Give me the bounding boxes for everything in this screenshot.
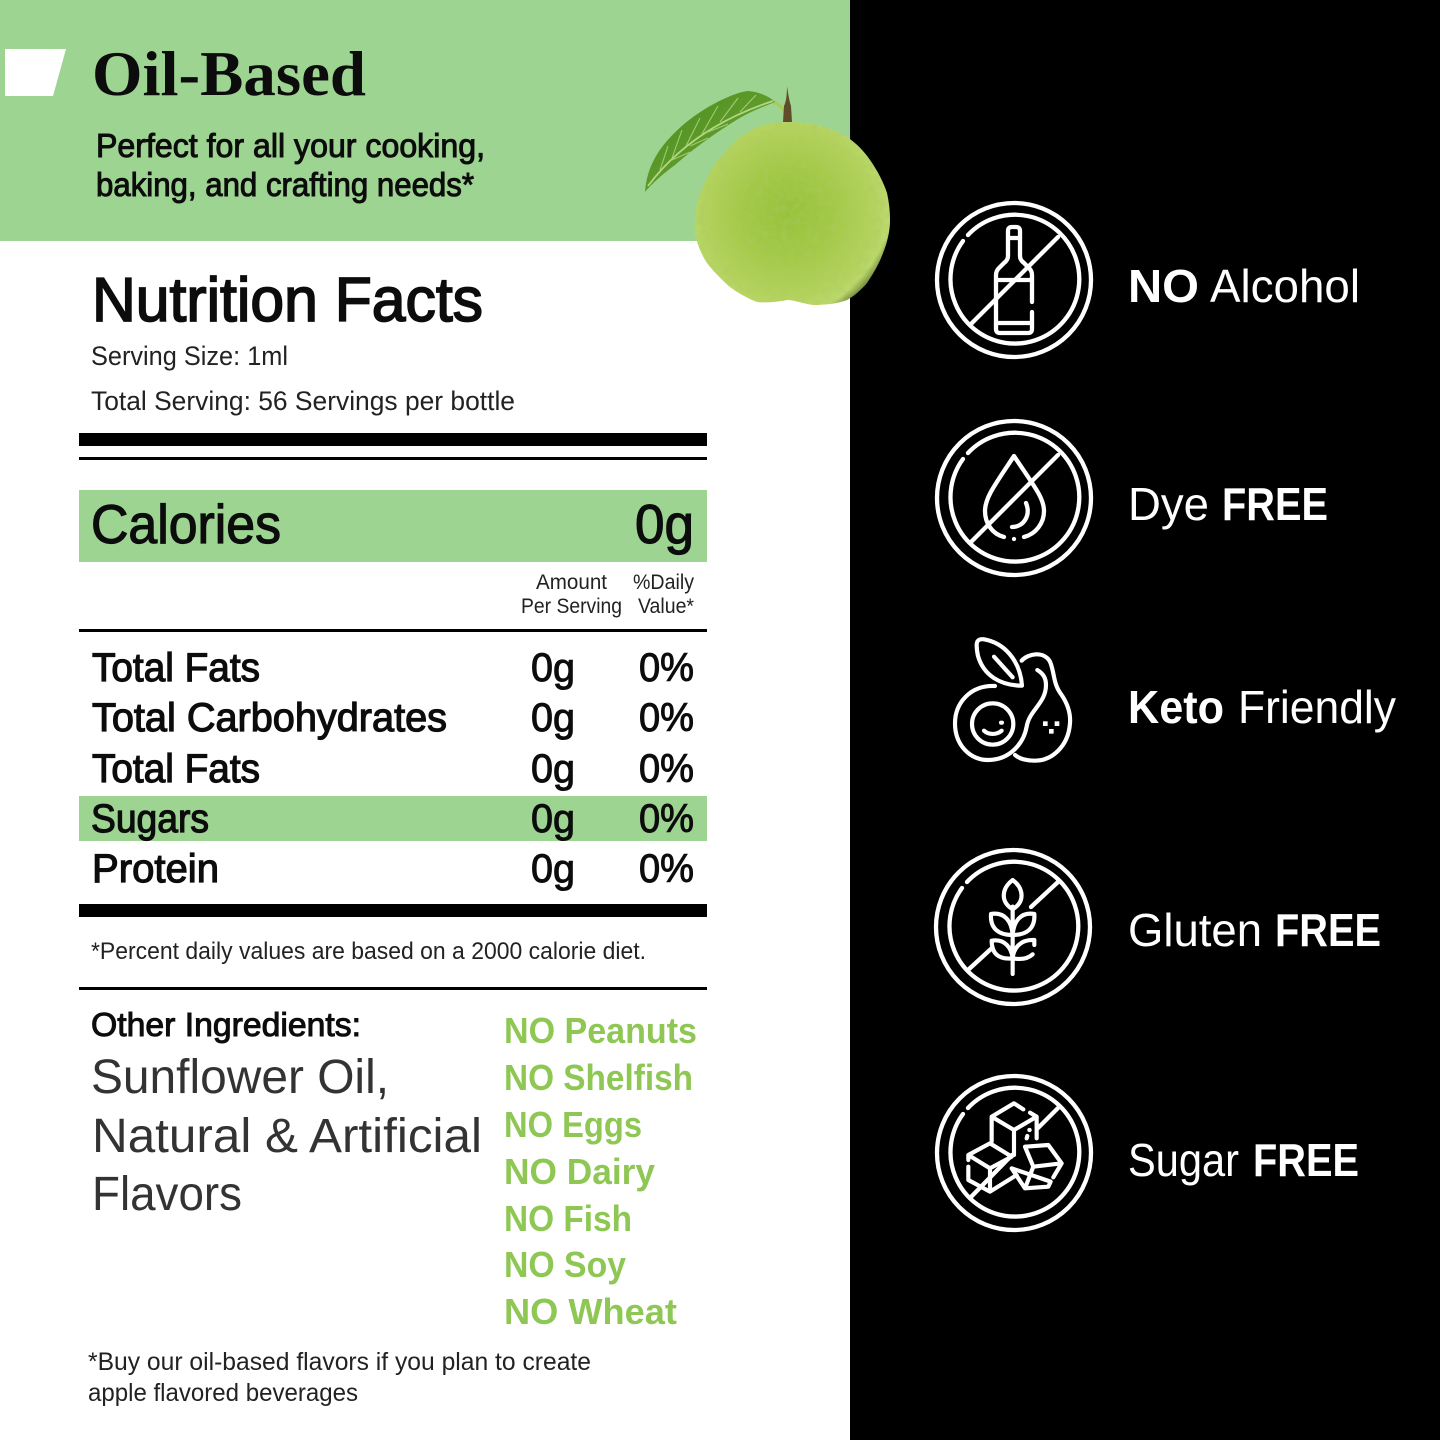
column headers	[521, 571, 694, 618]
column headers: %Daily	[633, 571, 694, 594]
label: sugar free	[1128, 1134, 1359, 1186]
row: total carbohydrates: Total Carbohydrates	[92, 696, 447, 740]
serving info	[91, 341, 515, 416]
icon: sugar free	[937, 1076, 1091, 1230]
nutrition facts heading: Nutrition Facts	[92, 266, 483, 335]
label: no alcohol: NO	[1128, 260, 1199, 312]
other ingredients: Other Ingredients:	[91, 1006, 361, 1043]
row: sugars	[91, 797, 694, 841]
calories row	[79, 490, 707, 562]
row: protein	[92, 847, 694, 891]
nutrient table	[79, 646, 707, 891]
icon: dye free	[937, 421, 1091, 575]
daily value note: *Percent daily values are based on a 2000 calorie diet.	[91, 938, 646, 965]
top rule thick	[79, 433, 707, 446]
other ingredients	[91, 1006, 482, 1221]
row: protein: Protein	[92, 847, 219, 891]
subtitle: Perfect for all your cooking,	[96, 127, 485, 164]
allergen free list: NO Peanuts	[504, 1010, 697, 1051]
row: protein: 0g	[531, 847, 575, 891]
header rule	[79, 629, 707, 632]
row: total carbohydrates: 0g	[531, 696, 575, 740]
label: keto friendly	[1128, 681, 1396, 733]
panel: black claims column	[850, 0, 1440, 1440]
row: total fats: 0%	[639, 646, 694, 690]
allergen free list: NO Eggs	[504, 1104, 642, 1145]
serving info: Total Serving: 56 Servings per bottle	[91, 386, 515, 416]
guava shaded edge	[695, 122, 890, 305]
row: total fats	[92, 646, 694, 690]
other ingredients: Flavors	[92, 1168, 242, 1221]
row: total fats repeat: Total Fats	[92, 747, 260, 791]
bottom thick rule	[79, 904, 707, 917]
label: dye free: FREE	[1222, 478, 1328, 530]
row: protein: 0%	[639, 847, 694, 891]
label: gluten free	[1128, 904, 1381, 956]
subtitle: baking, and crafting needs*	[96, 166, 474, 203]
label: sugar free: FREE	[1253, 1134, 1359, 1186]
label: gluten free: FREE	[1275, 904, 1381, 956]
row: sugars: 0%	[639, 797, 694, 841]
row: total fats repeat: 0%	[639, 747, 694, 791]
calories row: Calories	[91, 493, 281, 555]
row: total carbohydrates: 0%	[639, 696, 694, 740]
top rule thin	[79, 457, 707, 460]
sugars highlight	[79, 796, 707, 841]
icon: gluten free	[936, 850, 1090, 1004]
row: total fats: 0g	[531, 646, 575, 690]
allergen free list: NO Fish	[504, 1198, 632, 1239]
calories row: 0g	[635, 493, 694, 555]
column headers: Per Serving	[521, 595, 622, 618]
footnote: *Buy our oil-based flavors if you plan to create	[88, 1348, 591, 1376]
icon: no alcohol	[937, 203, 1091, 357]
icon: keto avocado and pear	[955, 639, 1070, 761]
footnote	[88, 1348, 591, 1407]
row: total fats repeat	[92, 747, 694, 791]
row: total carbohydrates	[92, 696, 694, 740]
row: sugars: 0g	[531, 797, 575, 841]
column headers: Value*	[638, 595, 694, 618]
guava body	[695, 122, 890, 305]
other ingredients: Sunflower Oil,	[91, 1051, 389, 1104]
label: dye free	[1128, 478, 1328, 530]
serving info: Serving Size: 1ml	[91, 341, 288, 371]
title: Oil-Based	[92, 39, 366, 109]
label: dye free: Dye	[1128, 478, 1209, 530]
row: total fats repeat: 0g	[531, 747, 575, 791]
row: total fats: Total Fats	[92, 646, 260, 690]
label: gluten free: Gluten	[1128, 904, 1262, 956]
column headers: Amount	[536, 571, 607, 594]
white tab marker	[5, 49, 66, 96]
label: keto friendly: Keto	[1128, 681, 1224, 733]
allergen free list	[504, 1010, 697, 1332]
allergen free list: NO Wheat	[504, 1291, 677, 1332]
row: sugars: Sugars	[91, 797, 209, 841]
panel: header band	[0, 0, 850, 241]
allergen free list: NO Shelfish	[504, 1057, 693, 1098]
ingredients rule	[79, 987, 707, 990]
label: no alcohol: Alcohol	[1210, 260, 1360, 312]
allergen free list: NO Soy	[504, 1244, 626, 1285]
other ingredients: Natural & Artificial	[92, 1110, 482, 1163]
label: sugar free: Sugar	[1128, 1134, 1239, 1186]
label: keto friendly: Friendly	[1238, 681, 1396, 733]
footnote: apple flavored beverages	[88, 1379, 358, 1407]
icon: guava fruit with leaf	[645, 86, 890, 305]
allergen free list: NO Dairy	[504, 1151, 655, 1192]
subtitle	[96, 127, 485, 203]
label: no alcohol	[1128, 260, 1360, 312]
